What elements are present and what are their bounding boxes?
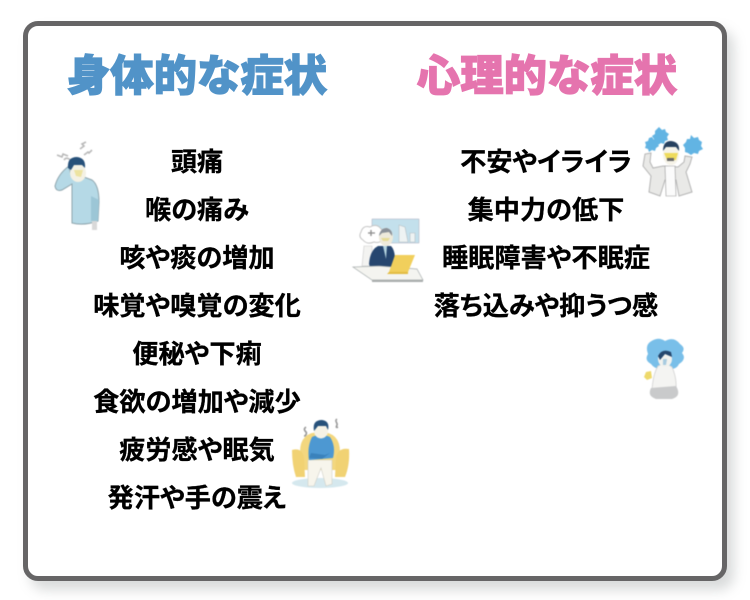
list: psychological symptoms: 睡眠障害や不眠症	[442, 243, 650, 273]
icon: man with headache	[54, 141, 100, 230]
list: physical symptoms: 便秘や下痢	[132, 339, 262, 369]
heading: physical symptoms: 身体的な症状	[67, 53, 327, 101]
list: psychological symptoms: 不安やイライラ	[460, 147, 632, 177]
list: psychological symptoms: 落ち込みや抑うつ感	[434, 291, 658, 321]
icon: tired man in armchair	[291, 418, 350, 488]
list: physical symptoms: 味覚や嗅覚の変化	[93, 291, 301, 321]
icon: depressed person under cloud	[644, 338, 684, 400]
list: physical symptoms: 疲労感や眠気	[119, 435, 275, 465]
icon: worker at laptop	[352, 218, 424, 282]
list: psychological symptoms	[434, 147, 658, 321]
list: physical symptoms	[93, 147, 301, 513]
list: psychological symptoms: 集中力の低下	[468, 195, 624, 225]
icon: angry man	[642, 126, 704, 197]
heading: psychological symptoms: 心理的な症状	[417, 53, 677, 101]
list: physical symptoms: 食欲の増加や減少	[93, 387, 301, 417]
list: physical symptoms: 発汗や手の震え	[108, 483, 286, 513]
list: physical symptoms: 喉の痛み	[145, 195, 249, 225]
list: physical symptoms: 咳や痰の増加	[119, 243, 275, 273]
list: physical symptoms: 頭痛	[171, 147, 223, 177]
